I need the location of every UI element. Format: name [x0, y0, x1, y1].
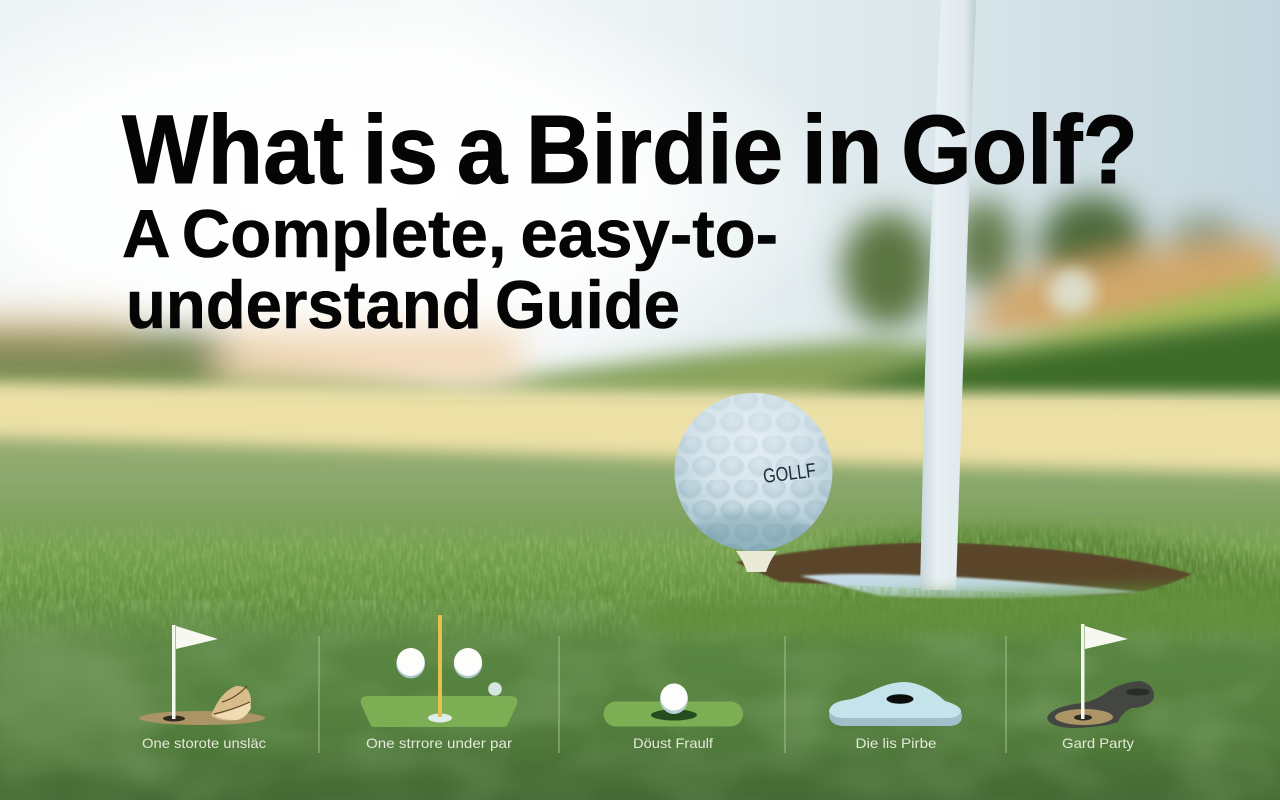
- icon label 4: Die lis Pirbe: [856, 735, 937, 751]
- icon label 3: Döust Fraulf: [633, 735, 713, 751]
- icon: pale blue mound with hole: [829, 682, 962, 726]
- grass texture: [0, 526, 1280, 638]
- flag pole: [920, 0, 976, 590]
- icon: ball at hole on green strip: [604, 684, 743, 726]
- subtitle: understand Guide: [126, 267, 680, 343]
- icon label 1: One storote unsläc: [142, 735, 266, 751]
- icon: flag and shell on sand: [139, 625, 265, 725]
- ball brand text: GOLLF: [762, 460, 817, 488]
- icon: flag, hole and dark club head: [1047, 624, 1154, 728]
- golf hole: [735, 528, 1280, 600]
- background photo: sky: [0, 0, 1280, 400]
- title: What is a Birdie in Golf?: [122, 95, 1138, 204]
- subtitle: A Complete, easy-to-: [122, 196, 778, 272]
- icon label 5: Gard Party: [1062, 735, 1134, 751]
- background photo: distant trees and hills: [0, 195, 1280, 400]
- golf ball: [674, 393, 832, 551]
- icon label 2: One strrore under par: [366, 735, 512, 751]
- golf tee: [736, 551, 777, 572]
- subtitle: [122, 196, 778, 343]
- icon row: [139, 615, 1154, 753]
- background photo: fairway and green: [0, 382, 1280, 800]
- front grass lip: [640, 582, 1280, 632]
- icon: two balls and yellow pin on green: [361, 615, 517, 727]
